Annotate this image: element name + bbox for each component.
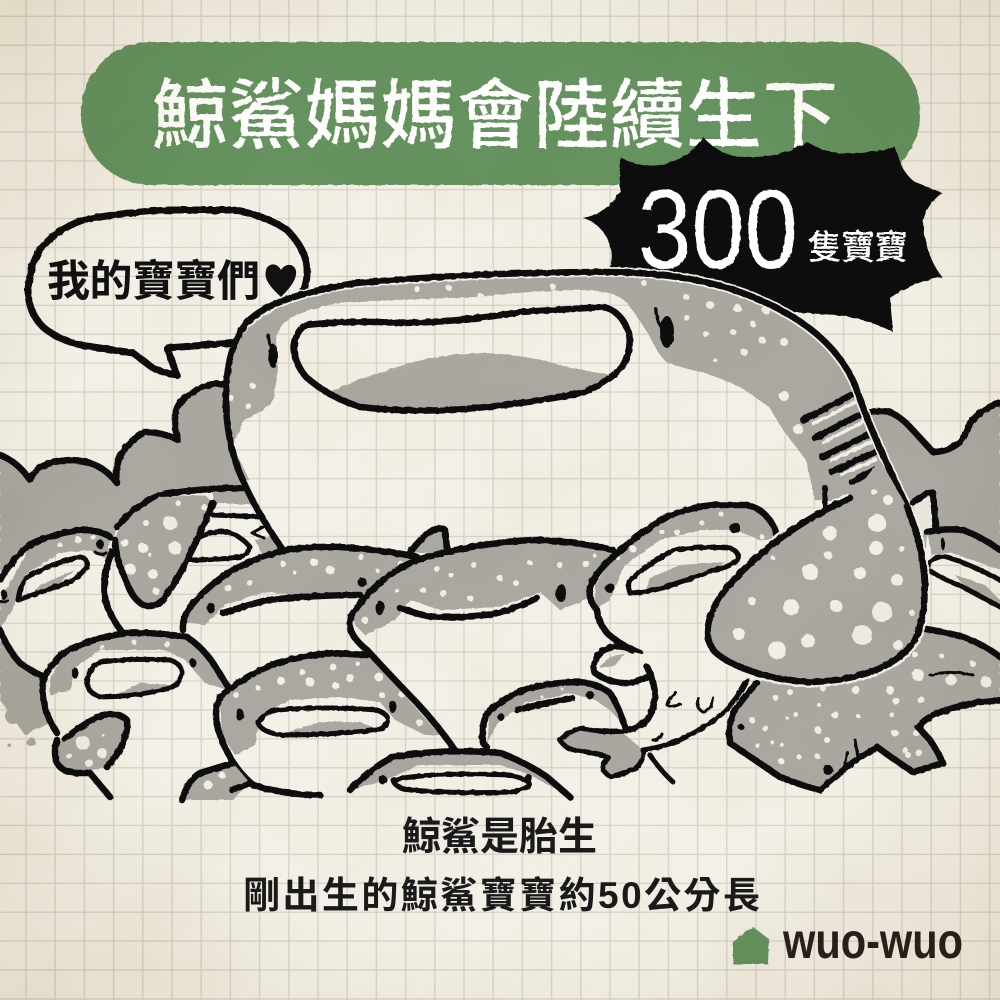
whale: far right baby	[913, 493, 1000, 630]
mother gray back	[226, 272, 907, 507]
small fin	[913, 493, 933, 535]
mother outline	[240, 272, 907, 507]
mother eyes	[268, 344, 278, 368]
whale baby: small bottom right of center	[480, 682, 630, 790]
whale baby: far left	[0, 530, 123, 677]
icon: heart	[266, 264, 296, 297]
mother spots	[228, 280, 803, 434]
tail spots	[733, 489, 915, 659]
whale baby: center left	[183, 547, 417, 687]
mother whale body	[224, 272, 907, 640]
speech bubble	[28, 210, 307, 375]
title banner	[81, 42, 920, 185]
whale baby: bottom center	[350, 751, 570, 797]
unit label: 隻寶寶	[808, 229, 908, 267]
number 300: 300	[638, 167, 798, 292]
whale baby: lower left	[42, 633, 230, 797]
black burst badge	[583, 137, 942, 332]
title text: 鯨鯊媽媽會陸續生下	[152, 74, 838, 159]
burst shape	[583, 137, 942, 332]
whale: large fin lower right	[729, 628, 1000, 790]
bubble outline	[28, 210, 307, 375]
mother gills	[812, 401, 877, 475]
caption: line 1: 鯨鯊是胎生	[402, 816, 597, 859]
wordmark: wuo-wuo	[782, 913, 963, 969]
green pill	[81, 42, 920, 185]
baby whale curled belly up	[560, 646, 747, 782]
small tail fin	[182, 763, 250, 800]
logo	[733, 913, 963, 969]
whale baby: beside mother's tail	[590, 505, 777, 720]
icon: house	[733, 927, 769, 964]
dorsal fin	[410, 530, 445, 553]
bubble text: 我的寶寶們	[47, 258, 260, 306]
right cloud	[860, 403, 1000, 570]
fin	[55, 714, 127, 773]
pectoral fin	[115, 495, 213, 606]
background gray clouds	[0, 384, 1000, 747]
caption: line 2: 剛出生的鯨鯊寶寶約50公分長	[243, 875, 760, 916]
left cloud	[0, 384, 250, 747]
whale baby: upper left with fin	[103, 488, 300, 640]
mother whale tail fin	[708, 460, 925, 682]
fin spots	[749, 652, 992, 764]
mother mouth	[329, 353, 613, 410]
whale baby: center	[350, 528, 640, 753]
whale baby: center lower	[182, 653, 457, 800]
tail of curled baby	[560, 728, 643, 777]
